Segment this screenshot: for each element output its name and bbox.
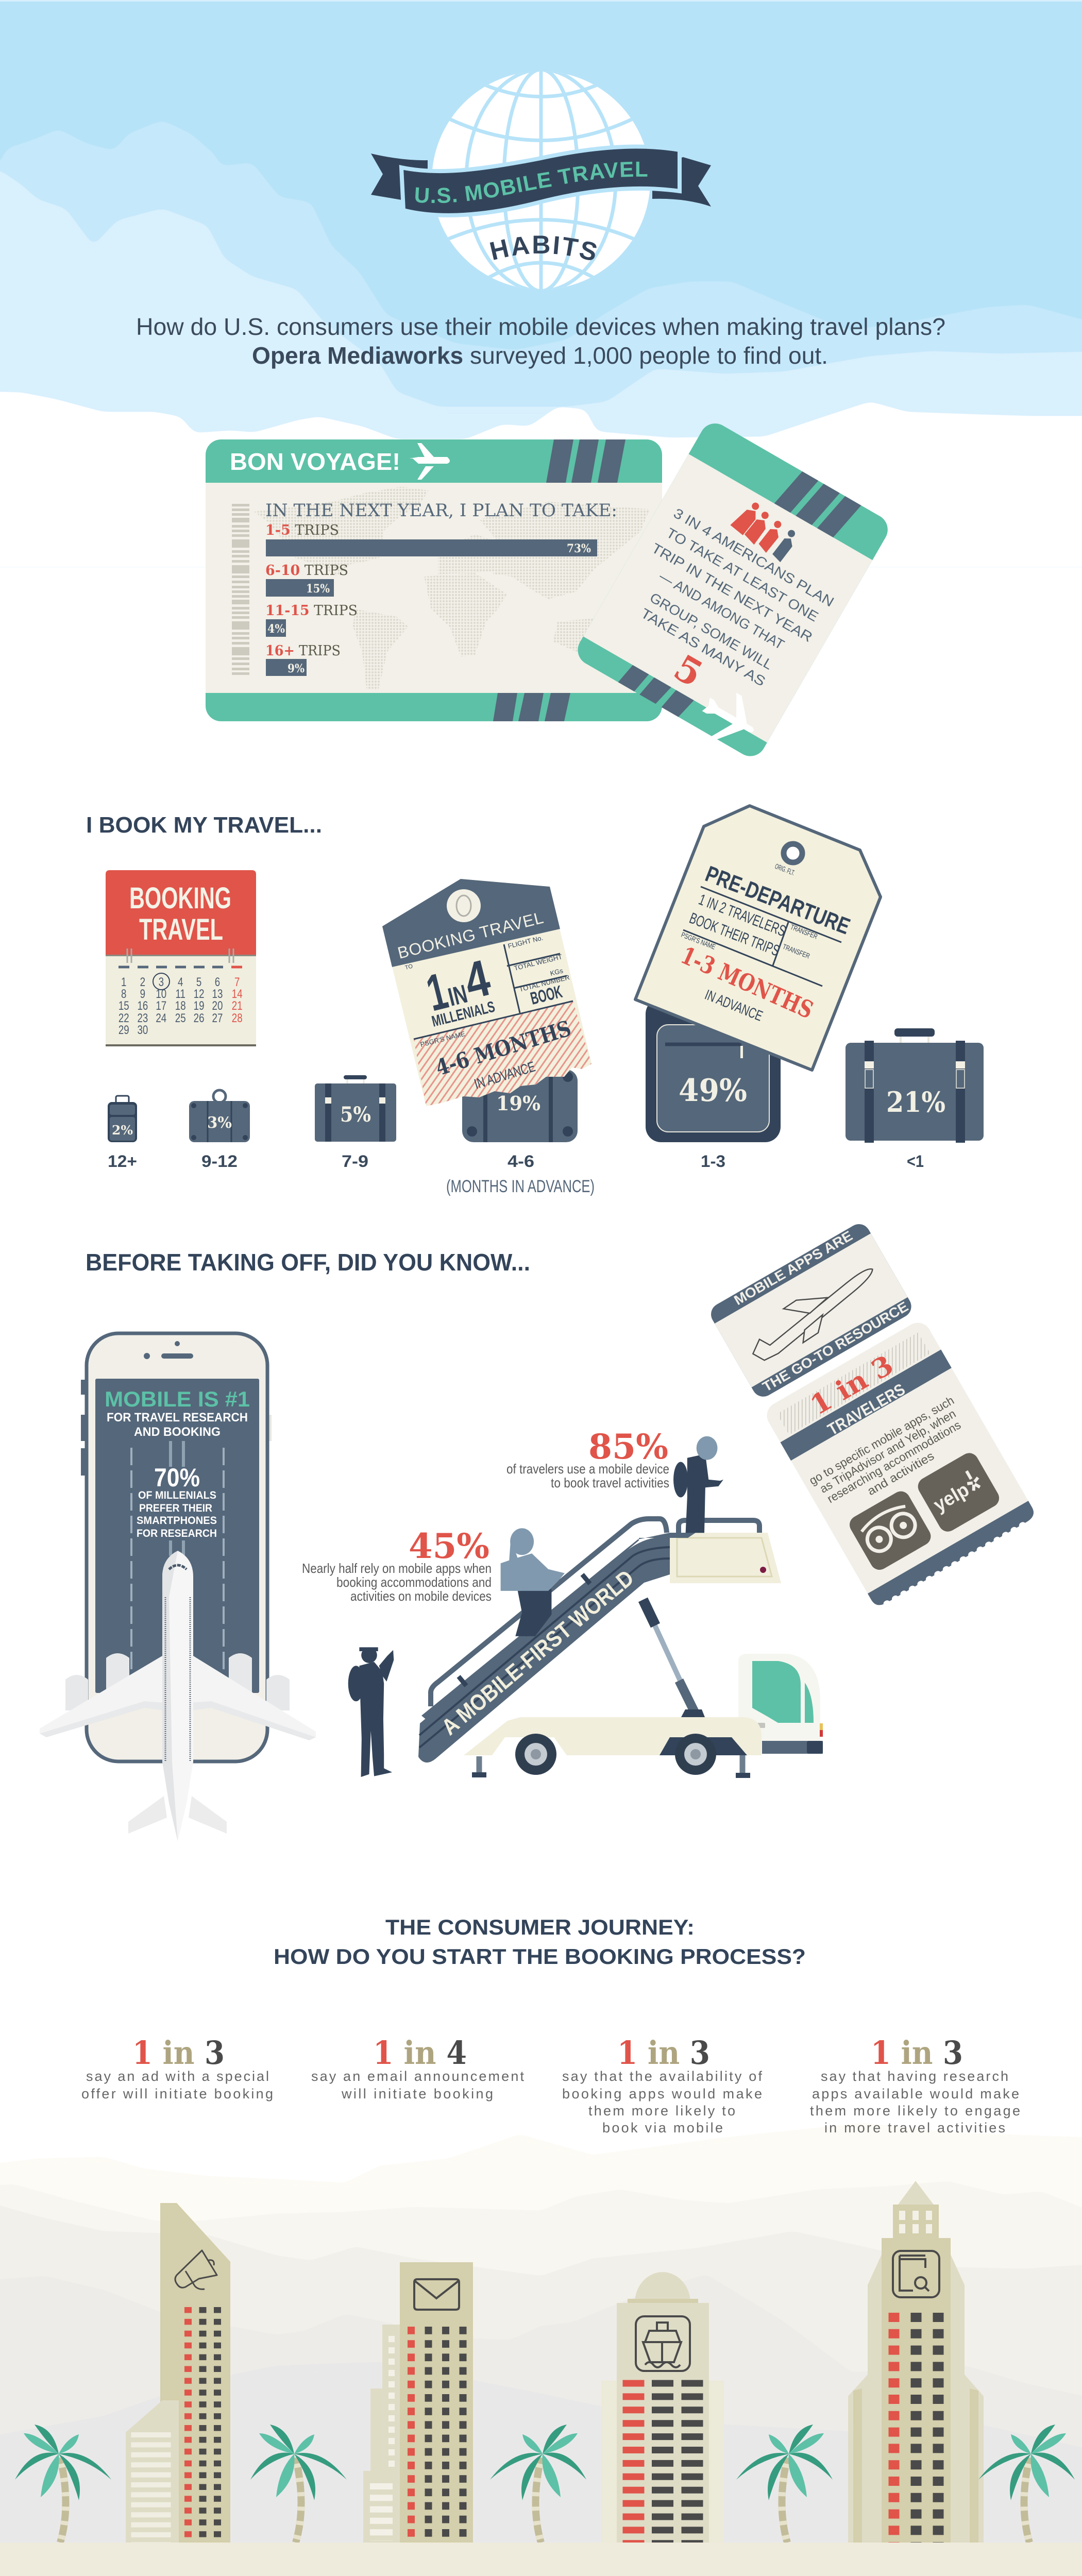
suitcase: 12+ months 2% <box>108 1096 137 1142</box>
phone headline: MOBILE IS #1 <box>105 1387 250 1411</box>
calendar: 8 <box>121 987 126 1001</box>
luggage tag: 4-6 months: 4-6 MONTHS <box>433 1015 574 1081</box>
bar: 1-5 trips: 73% <box>567 542 591 555</box>
phone stat: OF MILLENIALS <box>138 1489 216 1501</box>
stat column: booking apps: say that the availability of <box>562 2069 762 2084</box>
stat column: booking apps: book via mobile <box>602 2120 723 2136</box>
luggage tag: 1-3 months: TRANSFER <box>782 942 811 960</box>
calendar: 21 <box>232 999 243 1013</box>
luggage tag: 1-3 months: PRE-DEPARTURE <box>702 861 853 939</box>
stat: 45%: booking accommodations and <box>336 1574 492 1590</box>
luggage tag: 4-6 months: IN <box>445 979 470 1012</box>
phone stat: SMARTPHONES <box>137 1515 217 1527</box>
stat column: research apps: apps available would make <box>812 2086 1019 2102</box>
luggage tag: 1-3 months: 1 IN 2 TRAVELERS <box>696 891 788 940</box>
stat column: email: say an email announcement <box>311 2069 524 2084</box>
ticket body text <box>807 1394 975 1520</box>
icon: yelp: yelp <box>930 1479 973 1516</box>
calendar: 4 <box>178 975 183 989</box>
sky background with clouds <box>0 0 1082 567</box>
phone stat: 70% <box>154 1463 200 1492</box>
luggage tag: 4-6 months: FLIGHT No. <box>507 934 544 950</box>
luggage tag: 4-6 months: PSGR'S NAME <box>419 1030 466 1048</box>
calendar: 16 <box>137 999 148 1013</box>
ticket text: — AND AMONG THAT <box>656 568 787 653</box>
building: advertising tower <box>126 2203 230 2543</box>
suitcase: 4-6 months 19%: 19% <box>496 1092 540 1115</box>
stat column: research apps <box>810 2034 1020 2136</box>
heading: consumer journey: THE CONSUMER JOURNEY: <box>385 1915 695 1939</box>
stat: 85%: of travelers use a mobile device <box>506 1461 669 1477</box>
title globe logo <box>371 71 711 290</box>
ticket body text: as TripAdvisor and Yelp, when <box>818 1406 958 1496</box>
calendar: 24 <box>156 1011 166 1025</box>
axis labels: (MONTHS IN ADVANCE) <box>446 1177 595 1196</box>
bar: 1-5 trips: 1-5 TRIPS <box>265 522 339 538</box>
calendar: 23 <box>137 1011 148 1025</box>
bar: 6-10 trips: 15% <box>306 582 330 596</box>
luggage tag: 4-6 months: TOTAL WEIGHT <box>513 953 563 972</box>
ticket: mobile apps are the go-to resource: MOBILE APPS ARE <box>731 1228 855 1308</box>
stat: 45% <box>302 1526 492 1604</box>
figure: man on platform <box>673 1436 723 1533</box>
panel: tilted ticket <box>572 418 893 762</box>
icon: envelope <box>414 2279 459 2310</box>
intro text: How do U.S. consumers use their mobile devices when making travel plans? <box>136 313 945 340</box>
icon: plane <box>694 683 766 753</box>
ticket text <box>618 504 837 699</box>
airplane <box>40 1551 316 1841</box>
luggage tag: 4-6 months: TO <box>404 963 414 971</box>
luggage tag: 1-3 months: BOOK THEIR TRIPS <box>687 910 782 959</box>
calendar: 6 <box>215 975 220 989</box>
heading: before taking off: BEFORE TAKING OFF, DID YOU KNOW... <box>86 1249 530 1276</box>
stat column: email: will initiate booking <box>341 2086 493 2102</box>
axis labels <box>108 1152 924 1196</box>
luggage tag: 4-6 months: MILLENIALS <box>430 998 497 1030</box>
bar: 16+ trips: 9% <box>288 662 305 675</box>
stat column: research apps: say that having research <box>821 2069 1008 2084</box>
suitcase: 12+ months 2%: 2% <box>112 1123 133 1138</box>
building: travel app tower <box>848 2181 984 2543</box>
building: cruise tower <box>601 2272 724 2543</box>
calendar: 27 <box>212 1011 223 1025</box>
ticket text: TAKE AS MANY AS <box>638 605 768 689</box>
suitcase: 1-3 months 49%: 49% <box>679 1073 747 1109</box>
icon: megaphone <box>175 2250 217 2289</box>
luggage tag: 1-3 months: PSGR'S NAME <box>680 930 717 951</box>
stat: 45%: activities on mobile devices <box>350 1588 492 1604</box>
calendar: 5 <box>196 975 201 989</box>
icon: ship <box>636 2316 690 2371</box>
calendar: 3 <box>159 975 164 989</box>
phone <box>81 1333 272 1761</box>
calendar: 17 <box>156 999 166 1013</box>
calendar: 7 <box>234 975 240 989</box>
ticket: mobile apps are the go-to resource <box>706 1219 916 1401</box>
bar: 16+ trips <box>265 643 341 676</box>
calendar: 13 <box>212 987 223 1001</box>
one in three: 1 in 3 <box>805 1349 899 1421</box>
ticket body text: researching accommodations <box>825 1418 963 1505</box>
heading: booking: I BOOK MY TRAVEL... <box>86 812 322 838</box>
axis labels: 1-3 <box>701 1152 725 1171</box>
calendar: 14 <box>232 987 243 1001</box>
figure: photographer <box>348 1647 394 1777</box>
world map <box>254 485 650 691</box>
suitcase: 9-12 months 3%: 3% <box>207 1114 232 1132</box>
palm trees <box>15 2425 1075 2543</box>
calendar: 9 <box>140 987 145 1001</box>
calendar: 2 <box>140 975 145 989</box>
stat column: email <box>311 2034 524 2102</box>
calendar: 29 <box>119 1023 129 1037</box>
luggage tag: 1-3 months <box>635 806 881 1070</box>
mountain backdrop <box>0 2123 1082 2571</box>
phone stat: FOR RESEARCH <box>137 1528 217 1539</box>
stat: 45%: Nearly half rely on mobile apps when <box>302 1561 492 1576</box>
luggage tag: 1-3 months: 1-3 MONTHS <box>677 941 818 1024</box>
luggage tag: 4-6 months: 4 <box>459 948 496 1010</box>
luggage tag: 4-6 months: KGs <box>549 967 564 977</box>
heading: consumer journey: HOW DO YOU START THE BOOKING PROCESS? <box>274 1944 806 1969</box>
stat: 85% <box>506 1427 669 1490</box>
beach ground <box>0 2543 1082 2576</box>
panel: boarding pass trips <box>206 439 662 721</box>
ticket: 1 in 3 travelers <box>762 1318 1038 1609</box>
ticket text: GROUP, SOME WILL <box>647 590 775 673</box>
heading: consumer journey <box>274 1915 806 1969</box>
calendar: 12 <box>194 987 205 1001</box>
suitcase: under 1 month 21% <box>846 1028 984 1143</box>
icon: travelers <box>726 497 802 564</box>
stat column: ad: say an ad with a special <box>86 2069 269 2084</box>
icon: book search <box>893 2251 939 2297</box>
travelers band label: TRAVELERS <box>824 1380 908 1439</box>
bar: 6-10 trips: 6-10 TRIPS <box>265 563 348 579</box>
icon: tripadvisor <box>846 1488 934 1573</box>
axis labels: 12+ <box>108 1152 137 1171</box>
ticket text: 3 IN 4 AMERICANS PLAN <box>671 505 837 610</box>
bar: 16+ trips: 16+ TRIPS <box>265 643 341 659</box>
luggage tag: 4-6 months: IN ADVANCE <box>472 1058 537 1092</box>
stat column: booking apps: 1 in 3 <box>617 2034 710 2072</box>
luggage tag: 4-6 months: BOOK <box>529 982 564 1009</box>
suitcase: 7-9 months 5% <box>315 1075 396 1142</box>
suitcase: 1-3 months 49% <box>646 998 781 1142</box>
calendar: 26 <box>194 1011 205 1025</box>
axis labels: 9-12 <box>201 1152 238 1171</box>
stat column: booking apps <box>562 2034 762 2136</box>
calendar: 20 <box>212 999 223 1013</box>
bar: 11-15 trips: 11-15 TRIPS <box>265 603 358 619</box>
calendar: 30 <box>137 1023 148 1037</box>
ticket text: TO TAKE AT LEAST ONE <box>664 525 821 624</box>
title ribbon <box>371 144 711 217</box>
axis labels: 7-9 <box>342 1152 368 1171</box>
bar: 11-15 trips: 4% <box>267 622 285 636</box>
luggage tag: 1-3 months: TRANSFER <box>789 923 819 941</box>
calendar: 18 <box>175 999 186 1013</box>
intro text: Opera Mediaworks surveyed 1,000 people to find out. <box>252 342 828 369</box>
stat column: ad: 1 in 3 <box>132 2034 225 2072</box>
luggage tag: 4-6 months: TOTAL NUMBER <box>518 973 570 993</box>
calendar: BOOKING <box>129 882 231 915</box>
figure: woman on stairs <box>501 1528 565 1636</box>
icon: airplane line art <box>740 1260 887 1367</box>
plane icon <box>409 443 450 480</box>
calendar: 1 <box>121 975 126 989</box>
barcode <box>232 504 249 675</box>
stat column: research apps: 1 in 3 <box>871 2034 963 2072</box>
title line 1: U.S. MOBILE TRAVEL <box>415 162 647 203</box>
calendar: 22 <box>119 1011 129 1025</box>
stat column: booking apps: booking apps would make <box>562 2086 762 2102</box>
suitcase: 7-9 months 5%: 5% <box>340 1103 371 1127</box>
stat column: booking apps: them more likely to <box>588 2103 735 2119</box>
calendar: TRAVEL <box>139 913 223 946</box>
luggage tag: 4-6 months: 1 <box>421 962 453 1022</box>
luggage tag: 1-3 months: IN ADVANCE <box>703 987 765 1024</box>
suitcase: under 1 month 21%: 21% <box>886 1086 945 1118</box>
stat column: research apps: them more likely to engage <box>810 2103 1020 2119</box>
axis labels: 4-6 <box>508 1152 534 1171</box>
calendar: 25 <box>175 1011 186 1025</box>
calendar: 10 <box>156 987 166 1001</box>
title line 2: HABITS <box>489 236 597 260</box>
luggage tag: 1-3 months: ORIG. FLT. <box>774 862 796 877</box>
truck and mobile stairs <box>418 1519 823 1778</box>
calendar: 19 <box>194 999 205 1013</box>
calendar: 15 <box>119 999 129 1013</box>
icon: yelp <box>915 1450 1003 1535</box>
phone: AND BOOKING <box>134 1425 221 1439</box>
luggage tag: 4-6 months: BOOKING TRAVEL <box>396 908 545 962</box>
bar: 6-10 trips <box>265 563 348 597</box>
stat column: ad: offer will initiate booking <box>81 2086 273 2102</box>
calendar: 11 <box>176 987 185 1001</box>
luggage tag: 4-6 months <box>382 879 591 1106</box>
chart heading: IN THE NEXT YEAR, I PLAN TO TAKE: <box>265 500 617 521</box>
stat column: research apps: in more travel activities <box>824 2120 1005 2136</box>
intro text <box>136 313 945 369</box>
ticket body text: and activities <box>865 1449 936 1498</box>
building: email tower <box>363 2262 473 2543</box>
phone stat <box>137 1463 217 1539</box>
bon voyage heading: BON VOYAGE! <box>230 448 400 475</box>
stairs label: A MOBILE-FIRST WORLD <box>437 1565 638 1740</box>
bar: 11-15 trips <box>265 603 358 637</box>
calendar: 28 <box>232 1011 243 1025</box>
stat column: ad <box>81 2034 273 2102</box>
suitcase: 4-6 months 19% <box>462 1070 578 1142</box>
stat: 85%: 85% <box>588 1427 668 1467</box>
stat column: email: 1 in 4 <box>373 2034 467 2072</box>
suitcase: 9-12 months 3% <box>189 1090 250 1142</box>
ticket: mobile apps are the go-to resource: THE GO-TO RESOURCE <box>760 1299 911 1395</box>
stat: 85%: to book travel activities <box>551 1475 669 1490</box>
ticket body text: go to specific mobile apps, such <box>807 1394 956 1487</box>
axis labels: <1 <box>907 1152 924 1171</box>
bar: 1-5 trips <box>265 522 597 556</box>
phone stat: PREFER THEIR <box>139 1502 212 1514</box>
number five: 5 <box>667 646 710 696</box>
phone: FOR TRAVEL RESEARCH <box>107 1411 248 1425</box>
calendar <box>106 870 256 1046</box>
stat: 45%: 45% <box>409 1526 489 1566</box>
ticket text: TRIP IN THE NEXT YEAR <box>649 540 815 645</box>
